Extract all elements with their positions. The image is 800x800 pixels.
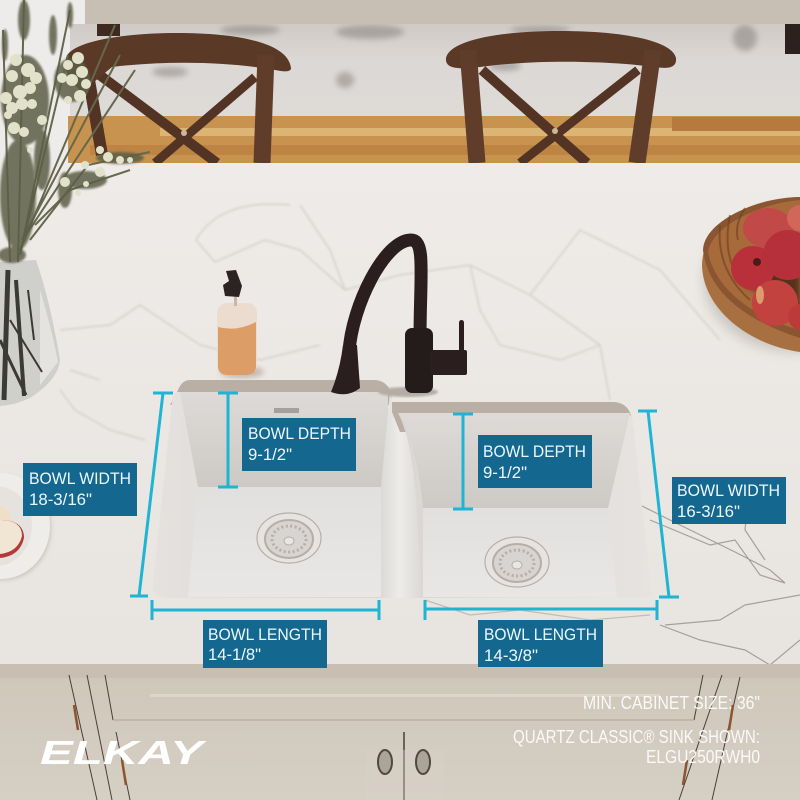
- dimension: left bowl depth: [218, 393, 238, 487]
- sink divider: [381, 392, 422, 598]
- logo: Elkay: ELKAY: [40, 734, 207, 771]
- text: sink model shown: QUARTZ CLASSIC® SINK SHOWN:: [513, 727, 760, 747]
- dimension: right bowl depth: [453, 414, 473, 509]
- plate with apple slice: [0, 473, 51, 580]
- label: left bowl depth: BOWL DEPTH: [248, 425, 351, 443]
- label: right bowl width: [672, 477, 786, 524]
- label: left bowl depth: 9-1/2": [248, 446, 292, 464]
- label: left bowl width: 18-3/16": [29, 491, 92, 509]
- label: right bowl length: BOWL LENGTH: [484, 626, 597, 644]
- label: right bowl depth: BOWL DEPTH: [483, 443, 586, 461]
- label: left bowl depth: [242, 418, 356, 471]
- label: right bowl length: [478, 620, 603, 667]
- marble countertop: [0, 163, 800, 668]
- sink right bowl: [392, 402, 652, 598]
- label: right bowl depth: 9-1/2": [483, 464, 527, 482]
- cabinet knob right: [416, 750, 430, 774]
- label: left bowl length: 14-1/8": [208, 646, 261, 664]
- chair right: [446, 31, 676, 163]
- label: left bowl length: [203, 620, 327, 668]
- label: left bowl length: BOWL LENGTH: [208, 626, 322, 644]
- dimension: right bowl width: [638, 411, 679, 597]
- text: minimum cabinet size: MIN. CABINET SIZE: 36": [583, 693, 760, 713]
- soap dispenser: [217, 270, 264, 378]
- background room: bench, rug and wood floor: [0, 0, 800, 165]
- drain right: [485, 537, 549, 587]
- vase with plant: [0, 0, 150, 406]
- dimension: right bowl length: [425, 600, 657, 620]
- drain left: [257, 513, 321, 563]
- label: right bowl length: 14-3/8": [484, 647, 538, 665]
- text: sink model shown: [513, 727, 760, 767]
- label: right bowl depth: [478, 435, 592, 488]
- text: sink model shown: ELGU250RWH0: [646, 747, 760, 767]
- label: right bowl width: BOWL WIDTH: [677, 482, 780, 500]
- fruit bowl with apples: [702, 197, 800, 352]
- label: left bowl width: BOWL WIDTH: [29, 470, 131, 488]
- overflow badge: [274, 408, 299, 413]
- sink left bowl: [153, 380, 392, 598]
- chair left: [65, 33, 291, 163]
- label: left bowl width: [23, 463, 137, 516]
- label: right bowl width: 16-3/16": [677, 503, 740, 521]
- cabinet knob left: [378, 750, 392, 774]
- double-bowl sink: [153, 380, 652, 598]
- cabinet base: [0, 664, 800, 800]
- dimension: left bowl length: [152, 600, 379, 620]
- dimension: left bowl width: [130, 393, 173, 596]
- faucet: [331, 240, 467, 397]
